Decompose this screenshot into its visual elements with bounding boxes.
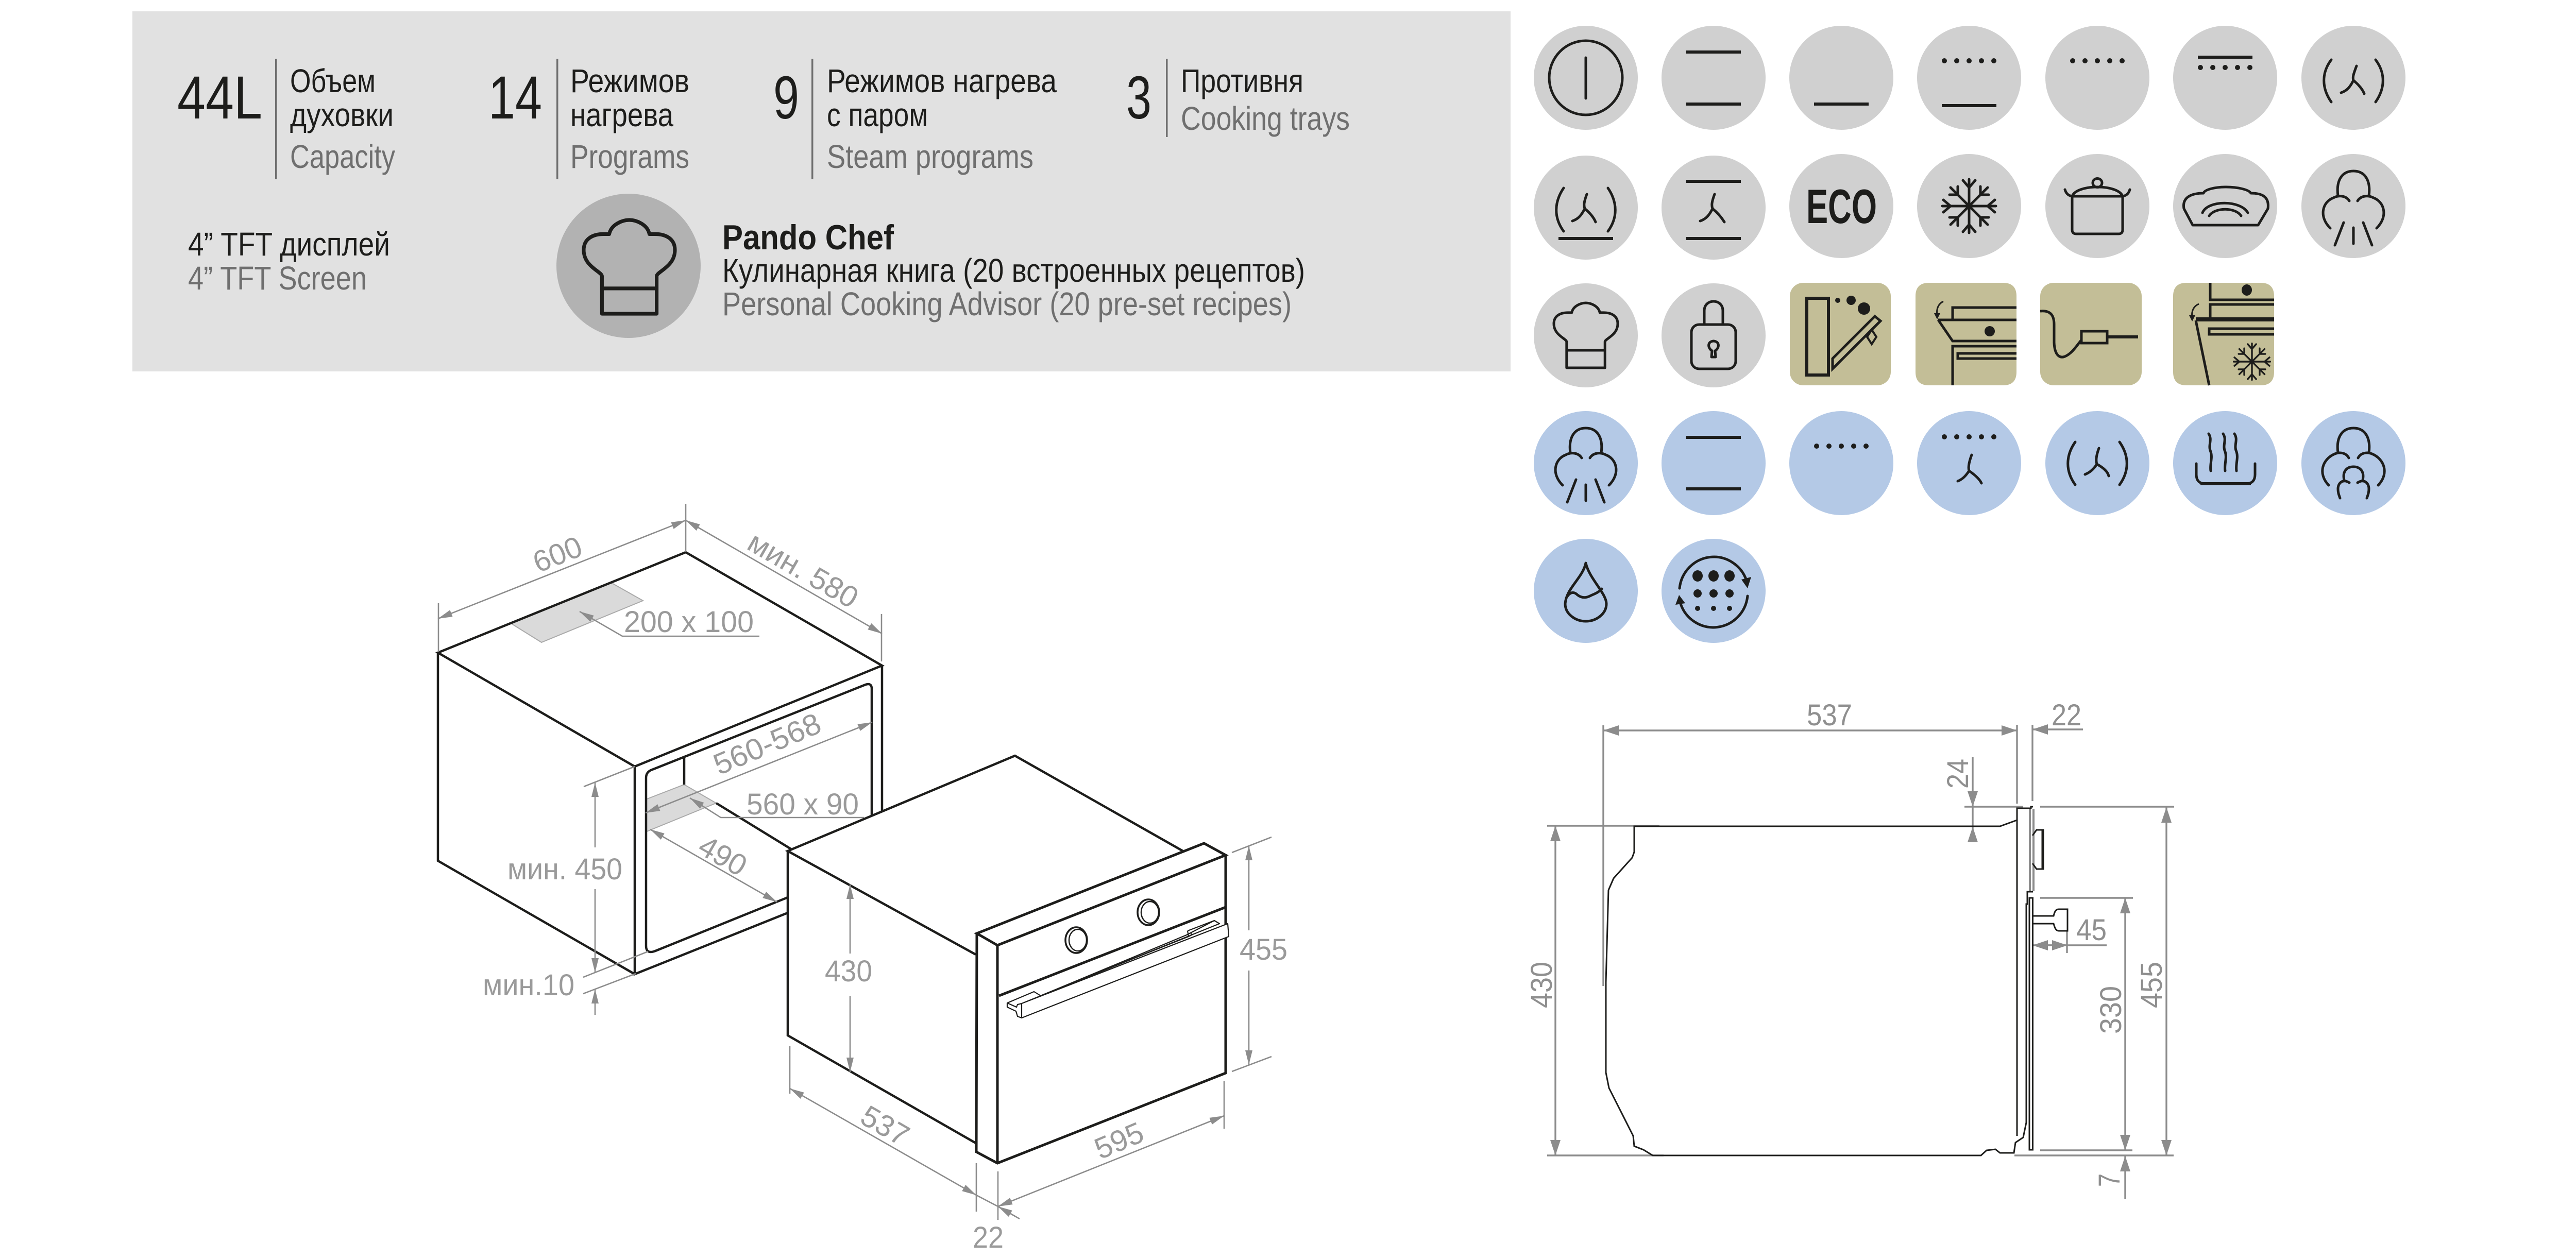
icon: steam over tray (2173, 411, 2277, 515)
dimensions: oven: 430 (825, 955, 872, 988)
panel: key specifications (132, 11, 1511, 371)
dimensions: cabinet: мин. 580 (742, 525, 864, 615)
spec: programs: Режимов (570, 62, 689, 99)
dimension labels: side view: 430 (1525, 962, 1558, 1008)
spec: steam programs: с паром (827, 96, 928, 133)
diagram: built-in cabinet (438, 504, 882, 1015)
spec: capacity: 44L (177, 64, 262, 132)
shaded zones (510, 583, 716, 832)
icon: steam grill with fan (1917, 411, 2021, 515)
dimensions: cabinet: 560-568 (708, 707, 826, 781)
icon: grill and bottom heat (1917, 26, 2021, 130)
spec: programs: Programs (570, 138, 689, 175)
spec: cooking trays: Cooking trays (1181, 100, 1350, 137)
text: Pando Chef: Кулинарная книга (20 встроенных рецептов) (722, 252, 1305, 289)
dimensions: oven (790, 837, 1287, 1254)
spec: steam programs: 9 (773, 64, 799, 132)
icon: bottom heat (1789, 26, 1893, 130)
icon: double grill (2173, 26, 2277, 130)
spec: TFT screen: 4” TFT дисплей (188, 226, 390, 263)
oven side outline (1606, 807, 2067, 1155)
icon: steam (2301, 154, 2405, 258)
dimensions: cabinet: мин. 450 (507, 853, 622, 886)
spec: cooking trays: Противня (1181, 62, 1303, 99)
spec: capacity (177, 59, 395, 179)
icon: pot (2045, 154, 2149, 258)
icon: chef hat large (556, 194, 701, 338)
dimension labels: side view: 7 (2093, 1173, 2126, 1187)
text: Pando Chef: Personal Cooking Advisor (20 pre-set recipes) (722, 285, 1292, 322)
icon: bread (2173, 154, 2277, 258)
icon: fan (2301, 26, 2405, 130)
icon: water drop (1534, 539, 1638, 643)
icon: chef hat (1534, 283, 1638, 387)
oven knobs (1065, 899, 1159, 953)
dimensions: cabinet (438, 504, 882, 1015)
spec: steam programs (773, 59, 1057, 179)
dimension labels: side view: 22 (2052, 699, 2081, 732)
text: Pando Chef: Pando Chef (722, 218, 894, 257)
dimension labels: side view: 45 (2076, 913, 2107, 947)
dimensions: oven: 22 (973, 1221, 1004, 1254)
spec: programs: 14 (488, 64, 542, 132)
text: Pando Chef (722, 218, 1305, 322)
spec: cooking trays: 3 (1126, 64, 1151, 132)
dimensions: cabinet: 200 x 100 (624, 605, 754, 639)
spec: steam programs: Режимов нагрева (827, 62, 1057, 99)
icon: defrost snowflake (1917, 154, 2021, 258)
spec: capacity: Объем (290, 62, 376, 99)
icon: ECO: ECO (1806, 179, 1877, 233)
icon: cooling with snowflake (2173, 283, 2274, 385)
spec: TFT screen (188, 226, 390, 297)
dimensions: oven: 595 (1090, 1116, 1148, 1166)
icon: fan with top and bottom heat (1662, 156, 1766, 260)
icon: top and bottom heat (1662, 26, 1766, 130)
icon: double steam (2301, 411, 2405, 515)
icon: steam blue (1534, 411, 1638, 515)
dimension labels: side view: 330 (2094, 986, 2128, 1034)
dimensions: cabinet: мин.10 (483, 968, 574, 1002)
icon: door feature (1790, 283, 1891, 385)
cabinet outline (438, 552, 882, 974)
dimension labels: side view: 24 (1941, 759, 1975, 789)
dimensions: oven: 537 (855, 1099, 915, 1153)
icon: ECO (1789, 154, 1893, 258)
icon: grill (2045, 26, 2149, 130)
icon: self-clean rotation (1662, 539, 1766, 643)
spec: programs (488, 59, 689, 179)
dimensions: oven: 455 (1240, 933, 1287, 966)
icon: power cable (2040, 283, 2142, 385)
spec: programs: нагрева (570, 96, 673, 133)
diagram: oven side view (1525, 699, 2174, 1199)
icon: steam fan (2045, 411, 2149, 515)
dimension labels: side view: 455 (2135, 962, 2168, 1008)
dimension labels: side view: 537 (1807, 699, 1852, 732)
dimensions: cabinet: 560 x 90 (747, 788, 859, 821)
icons: function grid (1534, 26, 2405, 643)
icon: power (1534, 26, 1638, 130)
diagram: oven isometric (788, 756, 1287, 1254)
icon: child lock (1662, 283, 1766, 387)
oven body (788, 756, 1226, 1163)
oven handle (1007, 921, 1229, 1018)
dimensions: cabinet: 600 (528, 530, 587, 580)
dimensions: cabinet: 490 (693, 829, 753, 883)
icon: steam grill (1789, 411, 1893, 515)
spec: cooking trays (1126, 59, 1350, 137)
dimensions: side view (1547, 725, 2174, 1199)
spec: capacity: духовки (290, 96, 394, 133)
spec: TFT screen: 4” TFT Screen (188, 260, 367, 297)
dimension labels: side view (1525, 699, 2168, 1187)
icon: steam top and bottom heat (1662, 411, 1766, 515)
icon: cooling system (1916, 283, 2016, 385)
spec: steam programs: Steam programs (827, 138, 1033, 175)
spec: capacity: Capacity (290, 138, 395, 175)
icon: fan with bottom heat (1534, 156, 1638, 260)
